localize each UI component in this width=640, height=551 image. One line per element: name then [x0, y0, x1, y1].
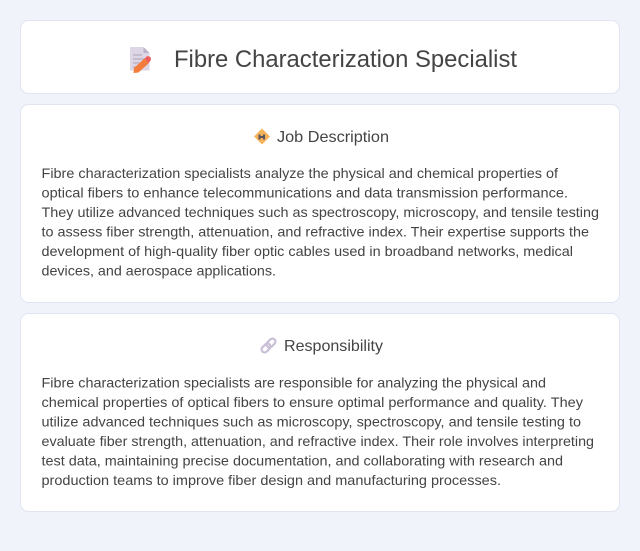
text block: job description: Fibre characterization specialists analyze the physical and chemical properties of — [42, 165, 558, 181]
text block: job description: optical fibers to enhance telecommunications and data transmission performance. — [42, 184, 568, 200]
text block: responsibility: evaluate fiber strength, attenuation, and refractive index. Their role involves interpreting — [42, 433, 594, 449]
text block: job description: to assess fiber strength, attenuation, and refractive index. Their expertise supports the — [42, 224, 589, 240]
text block: job description: development of high-quality fiber optic cables used in broadband networks, medical — [42, 243, 573, 259]
heading: responsibility: Responsibility — [284, 338, 383, 355]
icon: document with pencil — [130, 47, 151, 73]
text block: responsibility — [42, 374, 594, 488]
heading: job description: Job Description — [277, 129, 389, 146]
text block: responsibility: production teams to improve fiber design and manufacturing processes. — [42, 472, 501, 488]
icon: job description diamond — [254, 128, 270, 144]
title text: Fibre Characterization Specialist — [174, 46, 517, 73]
text block: responsibility: utilize advanced techniques such as microscopy, spectroscopy, and tensile testing to — [42, 414, 581, 430]
text block: responsibility: chemical properties of optical fibers to ensure optimal performance and quality. They — [42, 394, 583, 410]
text block: job description — [42, 165, 599, 278]
text block: responsibility: test data, maintaining precise documentation, and collaborating with research and — [42, 452, 563, 468]
icon: chain link — [260, 337, 277, 354]
text block: job description: They utilize advanced techniques such as spectroscopy, microscopy, and tensile testing — [42, 204, 599, 220]
panel: job description — [20, 104, 620, 302]
panel: responsibility — [20, 314, 620, 512]
text block: responsibility: Fibre characterization specialists are responsible for analyzing the physical and — [42, 374, 546, 390]
text block: job description: devices, and aerospace applications. — [42, 262, 276, 278]
panel: title — [20, 20, 620, 94]
